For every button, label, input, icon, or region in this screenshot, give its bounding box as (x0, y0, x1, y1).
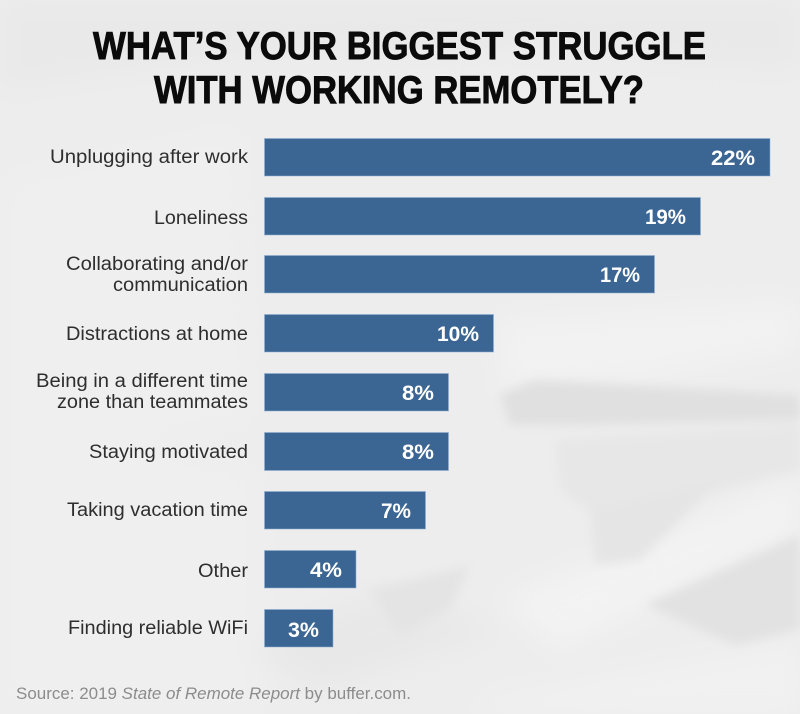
row: Collaborating and/or communication 17% (66, 254, 654, 296)
row: Being in a different time zone than teammates 8% (36, 371, 448, 413)
row: Loneliness 19%: 19% (645, 206, 686, 229)
title: WHAT’S YOUR BIGGEST STRUGGLE (93, 25, 706, 68)
row: Distractions at home 10%: 10% (437, 323, 479, 346)
row: Unplugging after work 22%: Unplugging after work (50, 147, 249, 168)
row: Other 4%: 4% (310, 559, 342, 582)
row: Unplugging after work 22% (50, 138, 770, 176)
row: Staying motivated 8%: 8% (402, 441, 434, 464)
row: Loneliness 19% (154, 198, 700, 235)
row: Finding reliable WiFi 3% (68, 610, 333, 647)
row: Unplugging after work 22%: 22% (711, 147, 755, 170)
row: Collaborating and/or communication 17%: Collaborating and/or (66, 254, 249, 275)
row: Finding reliable WiFi 3%: Finding reliable WiFi (68, 618, 248, 639)
row: Being in a different time zone than teammates 8%: Being in a different time (36, 371, 248, 392)
row: Being in a different time zone than teammates 8%: 8% (402, 382, 434, 405)
row: Staying motivated 8%: Staying motivated (89, 442, 248, 463)
row: Collaborating and/or communication 17%: 17% (600, 264, 640, 287)
row: Taking vacation time 7%: Taking vacation time (67, 500, 248, 521)
row: Taking vacation time 7% (67, 492, 426, 529)
row: Being in a different time zone than teammates 8%: zone than teammates (57, 392, 248, 413)
row: Staying motivated 8% (89, 432, 448, 470)
title (93, 25, 706, 112)
row: Distractions at home 10% (66, 314, 494, 352)
row: Collaborating and/or communication 17%: communication (113, 275, 248, 296)
row: Distractions at home 10%: Distractions at home (66, 324, 248, 345)
row: Finding reliable WiFi 3%: 3% (288, 619, 319, 642)
bar chart (36, 138, 770, 647)
row: Taking vacation time 7%: 7% (381, 500, 411, 523)
row: Loneliness 19%: Loneliness (154, 208, 248, 229)
title: WITH WORKING REMOTELY? (154, 69, 644, 112)
source note: Source: 2019 State of Remote Report by buffer.com. (16, 684, 411, 703)
row: Other 4%: Other (198, 561, 249, 582)
row: Other 4% (198, 550, 356, 588)
